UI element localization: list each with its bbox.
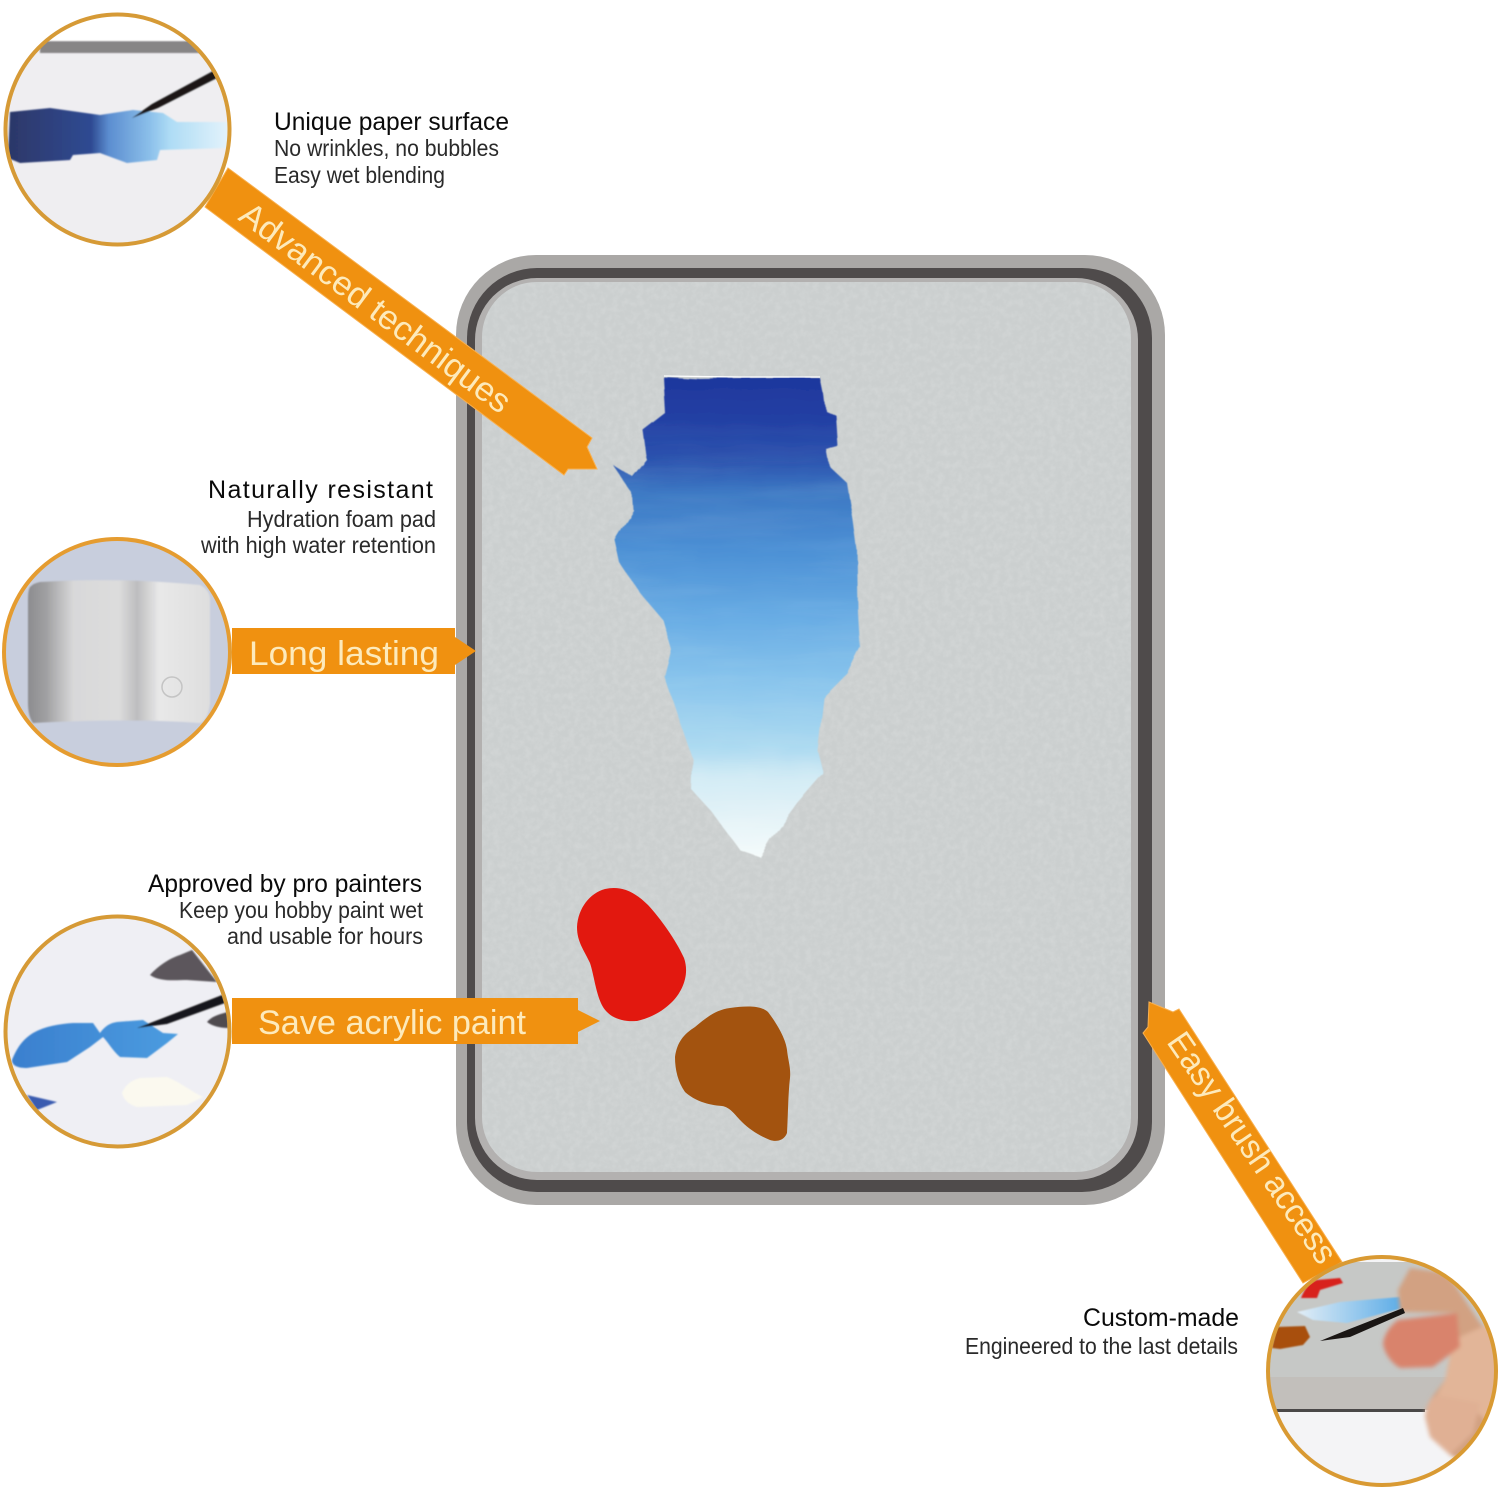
text: approved by pro painters: Approved by pro painters <box>148 870 422 898</box>
text: unique paper surface: Unique paper surface <box>274 108 509 136</box>
arrow: advanced techniques <box>205 168 597 475</box>
arrow: long lasting <box>232 628 476 674</box>
arrow: easy brush access: Easy brush access <box>1159 1025 1344 1271</box>
callout circle: save paint <box>6 916 230 1146</box>
text: naturally resistant: with high water retention <box>200 532 436 558</box>
arrow: advanced techniques: Advanced techniques <box>232 195 518 421</box>
red paint blob <box>577 888 686 1021</box>
text: custom-made: Custom-made <box>1083 1304 1239 1332</box>
palette tray <box>456 255 1165 1205</box>
callout circle: paper surface <box>4 12 232 246</box>
text: approved by pro painters: and usable for hours <box>227 923 423 949</box>
text: unique paper surface <box>274 108 509 188</box>
text: approved by pro painters <box>148 870 424 949</box>
arrow: long lasting: Long lasting <box>249 635 439 673</box>
text: approved by pro painters: Keep you hobby paint wet <box>179 897 424 923</box>
text: custom-made <box>965 1304 1239 1359</box>
blue gradient paint stroke <box>605 376 870 860</box>
text: unique paper surface: Easy wet blending <box>274 162 445 188</box>
text: naturally resistant <box>200 476 436 558</box>
callout circle: foam pad <box>4 539 230 765</box>
text: naturally resistant: Naturally resistant <box>208 476 433 504</box>
callout circle: brush access <box>1260 1257 1500 1485</box>
text: custom-made: Engineered to the last details <box>965 1333 1238 1359</box>
arrow: save acrylic paint: Save acrylic paint <box>258 1004 527 1042</box>
text: unique paper surface: No wrinkles, no bubbles <box>274 135 499 161</box>
arrow: save acrylic paint <box>232 998 600 1044</box>
text: naturally resistant: Hydration foam pad <box>247 506 436 532</box>
brown paint blob <box>675 1007 790 1141</box>
